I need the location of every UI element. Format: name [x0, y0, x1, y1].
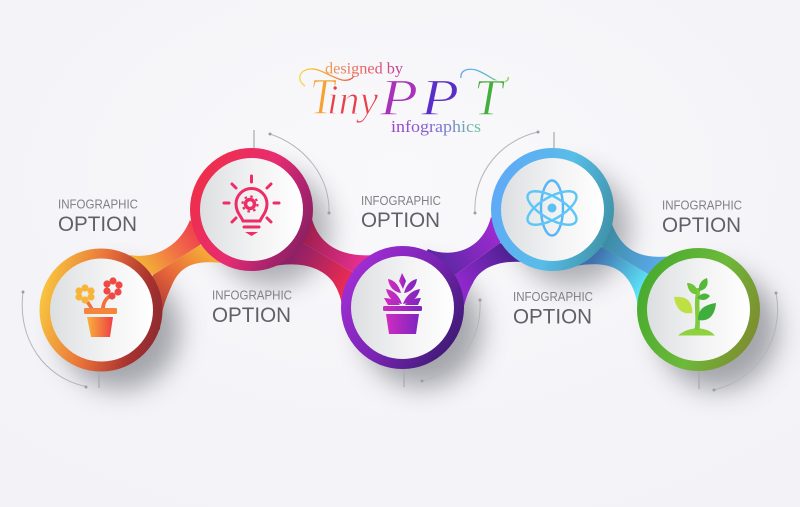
option 3 node: [341, 246, 464, 369]
option 2 node: [190, 148, 313, 271]
ring 2: [190, 148, 313, 271]
ring 3: [341, 246, 464, 369]
logo: designed by Tiny PPT infographics: infographics: [391, 117, 481, 136]
connector: option 1 to option 2: [125, 220, 225, 330]
text: option 1 label: [58, 198, 138, 236]
inner disc 2: [200, 158, 303, 261]
text: option 5 label: [662, 198, 742, 237]
logo: designed by Tiny PPT infographics: P: [379, 70, 418, 127]
text: option 3 label: INFOGRAPHIC: [361, 194, 441, 208]
logo: designed by Tiny PPT infographics: P: [420, 70, 459, 127]
connector: option 3 to option 4: [420, 217, 530, 310]
icon: atom: [523, 180, 581, 236]
inner disc 4: [501, 158, 604, 261]
text: option 4 label: OPTION: [513, 304, 592, 328]
icon: light bulb with gear: [224, 176, 279, 236]
text: option 1 label: OPTION: [58, 212, 137, 236]
connector: option 4 to option 5: [570, 224, 675, 308]
drop shadows: [60, 170, 778, 390]
text: option 5 label: INFOGRAPHIC: [662, 198, 742, 212]
logo: designed by Tiny PPT infographics: T: [310, 69, 337, 126]
option 4 node: [491, 148, 614, 271]
icon: potted succulent: [383, 273, 422, 334]
logo: designed by Tiny PPT infographics: iny: [327, 78, 378, 124]
ring 5: [637, 248, 760, 371]
text: option 2 label: [212, 288, 292, 327]
option 1 node: [40, 248, 162, 372]
connector: option 2 to option 3: [265, 219, 378, 310]
text: option 5 label: OPTION: [662, 213, 741, 237]
logo: designed by Tiny PPT infographics: designed by: [325, 60, 403, 78]
text: option 2 label: OPTION: [212, 303, 291, 327]
ring 1: [40, 248, 162, 372]
inner disc 1: [50, 258, 153, 362]
callout lines: [22, 130, 778, 392]
logo: designed by Tiny PPT infographics: T: [474, 70, 505, 127]
inner disc 5: [647, 258, 750, 361]
text: option 4 label: [513, 290, 593, 328]
icon: sprout: [674, 278, 716, 336]
ring 4: [491, 148, 614, 271]
text: option 3 label: [361, 194, 441, 232]
text: option 1 label: INFOGRAPHIC: [58, 198, 138, 212]
text: option 3 label: OPTION: [361, 208, 440, 232]
logo: designed by Tiny PPT infographics: [300, 60, 508, 136]
text: option 4 label: INFOGRAPHIC: [513, 290, 593, 304]
icon: flower pot: [75, 277, 123, 337]
text: option 2 label: INFOGRAPHIC: [212, 288, 292, 302]
option 5 node: [637, 248, 760, 371]
inner disc 3: [351, 256, 454, 359]
